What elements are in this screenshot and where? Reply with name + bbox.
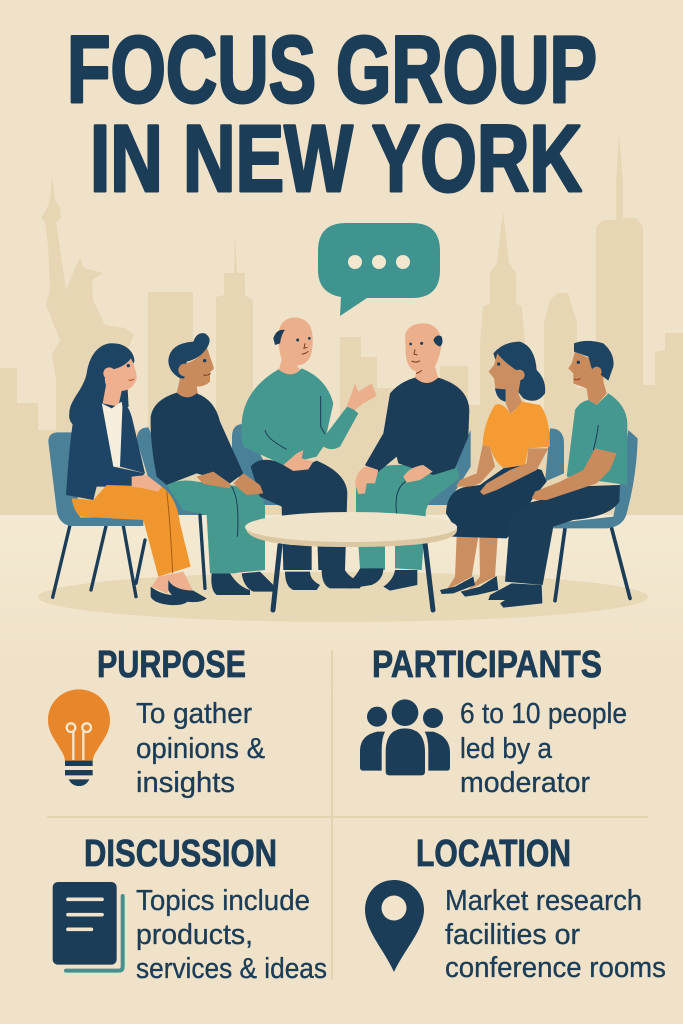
title bbox=[67, 17, 597, 212]
text: purpose: opinions & bbox=[136, 733, 265, 765]
text: discussion: services & ideas bbox=[136, 953, 327, 985]
speech bubble bbox=[318, 223, 440, 316]
panel: discussion bbox=[53, 833, 327, 985]
icon: people bbox=[360, 699, 450, 775]
panel: purpose bbox=[48, 644, 265, 799]
text: purpose: To gather bbox=[136, 698, 252, 730]
icon: map pin hole bbox=[382, 896, 406, 920]
person: moderator in teal bbox=[241, 317, 377, 590]
heading: location: LOCATION bbox=[416, 833, 571, 875]
panel: location bbox=[365, 833, 666, 984]
chair 4 bbox=[385, 430, 471, 505]
text: location: Market research bbox=[445, 885, 642, 917]
illustration: seated group bbox=[48, 317, 638, 610]
round table bbox=[245, 512, 457, 610]
text: discussion: Topics include bbox=[136, 885, 310, 917]
floor shadow bbox=[38, 572, 648, 622]
chair 5 bbox=[545, 428, 564, 482]
icon: light bulb bbox=[48, 689, 110, 786]
text: participants: moderator bbox=[460, 767, 590, 799]
heading: participants: PARTICIPANTS bbox=[372, 644, 602, 686]
text: participants: led by a bbox=[460, 733, 553, 765]
person: man in navy sweater bbox=[151, 333, 273, 595]
text: participants bbox=[460, 698, 627, 799]
text: purpose bbox=[136, 698, 265, 799]
person: man in teal t-shirt bbox=[488, 341, 627, 608]
text: participants: 6 to 10 people bbox=[460, 698, 627, 730]
right three participants bbox=[340, 323, 638, 608]
heading: discussion: DISCUSSION bbox=[84, 833, 277, 875]
panel: participants bbox=[360, 644, 627, 799]
text: location bbox=[445, 885, 666, 984]
text: discussion bbox=[136, 885, 327, 985]
person: woman in orange top bbox=[440, 342, 550, 597]
chair 6 bbox=[553, 430, 638, 601]
heading: purpose: PURPOSE bbox=[97, 644, 246, 686]
text: location: conference rooms bbox=[445, 952, 666, 984]
person: woman in jacket bbox=[66, 343, 207, 605]
text: discussion: products, bbox=[136, 919, 253, 951]
skyline background bbox=[0, 133, 683, 515]
chair 3 bbox=[232, 424, 319, 505]
text: location: facilities or bbox=[445, 919, 580, 951]
chair 1 bbox=[48, 432, 145, 597]
dividers bbox=[47, 650, 648, 980]
icon: document bbox=[53, 882, 123, 971]
person: man in navy with teal trousers bbox=[340, 323, 469, 591]
left three participants bbox=[48, 317, 377, 605]
icon: map pin bbox=[365, 880, 424, 972]
chair 2 bbox=[137, 427, 208, 515]
text: purpose: insights bbox=[136, 767, 235, 799]
